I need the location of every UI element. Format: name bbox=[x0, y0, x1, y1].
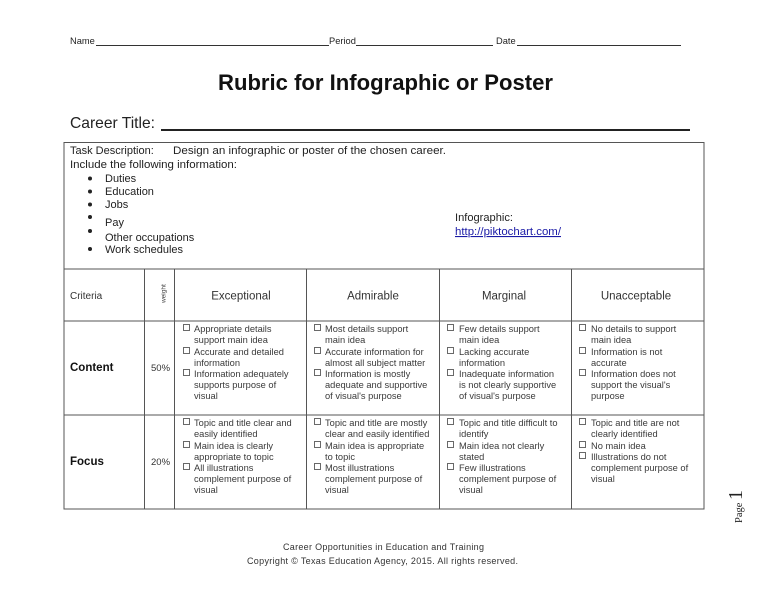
focus: admirable: to topic bbox=[325, 452, 355, 462]
content: exceptional: Appropriate details bbox=[194, 324, 272, 334]
focus: exceptional: All illustrations bbox=[194, 463, 254, 473]
infographic link: Infographic: bbox=[455, 212, 513, 224]
content: admirable: almost all subject matter bbox=[325, 358, 425, 368]
content: admirable: Information is mostly bbox=[325, 369, 411, 379]
footer: Copyright © Texas Education Agency, 2015. All rights reserved. bbox=[247, 556, 518, 566]
information list: Education bbox=[105, 186, 154, 198]
content: admirable: main idea bbox=[325, 335, 366, 345]
focus: marginal: Few illustrations bbox=[459, 463, 526, 473]
focus: marginal: stated bbox=[459, 452, 484, 462]
content: marginal: of visual's purpose bbox=[459, 391, 536, 401]
information list: Work schedules bbox=[105, 244, 184, 256]
title: Rubric for Infographic or Poster bbox=[218, 70, 553, 95]
table header row: Exceptional bbox=[211, 290, 271, 302]
focus: unacceptable: visual bbox=[591, 474, 615, 484]
criteria row: content: 50% bbox=[151, 363, 171, 374]
infographic link: http://piktochart.com/ bbox=[455, 226, 562, 238]
content: unacceptable: accurate bbox=[591, 358, 627, 368]
content: admirable: of visual's purpose bbox=[325, 391, 402, 401]
focus: exceptional: Main idea is clearly bbox=[194, 441, 273, 451]
career title field: Career Title: bbox=[70, 115, 155, 132]
content: exceptional: information bbox=[194, 358, 240, 368]
table header row: Unacceptable bbox=[601, 290, 671, 302]
focus: marginal bbox=[448, 418, 558, 495]
footer bbox=[247, 542, 518, 566]
footer: Career Opportunities in Education and Training bbox=[283, 542, 484, 552]
focus: admirable: clear and easily identified bbox=[325, 429, 429, 439]
rubric table grid bbox=[64, 142, 704, 509]
focus: marginal: identify bbox=[459, 429, 489, 439]
infographic link bbox=[455, 212, 562, 238]
focus: admirable: Topic and title are mostly bbox=[325, 418, 428, 428]
content: exceptional: supports purpose of bbox=[194, 380, 277, 390]
focus: exceptional: complement purpose of bbox=[194, 474, 292, 484]
task description panel bbox=[70, 145, 446, 256]
content: admirable: adequate and supportive bbox=[325, 380, 427, 390]
content: exceptional: visual bbox=[194, 391, 218, 401]
task description panel: Task Description: bbox=[70, 145, 154, 157]
content: unacceptable: Information is not bbox=[591, 347, 663, 357]
focus: admirable: Main idea is appropriate bbox=[325, 441, 424, 451]
content: admirable: Most details support bbox=[325, 324, 409, 334]
content: unacceptable bbox=[580, 324, 677, 401]
information list: Other occupations bbox=[105, 232, 195, 244]
table header row: Marginal bbox=[482, 290, 526, 302]
content: marginal: main idea bbox=[459, 335, 500, 345]
focus: unacceptable bbox=[580, 418, 689, 484]
information list: Duties bbox=[105, 173, 137, 185]
content: marginal: Lacking accurate bbox=[459, 347, 529, 357]
focus: marginal: Main idea not clearly bbox=[459, 441, 545, 451]
focus: unacceptable: clearly identified bbox=[591, 429, 658, 439]
table header row: Admirable bbox=[347, 290, 399, 302]
focus: unacceptable: Topic and title are not bbox=[591, 418, 680, 428]
focus: exceptional bbox=[184, 418, 292, 495]
content: admirable: Accurate information for bbox=[325, 347, 424, 357]
focus: marginal: visual bbox=[459, 485, 483, 495]
page number: 1 bbox=[725, 490, 747, 500]
content: unacceptable: support the visual's bbox=[591, 380, 671, 390]
focus: exceptional: visual bbox=[194, 485, 218, 495]
page number: Page bbox=[734, 502, 745, 523]
criteria row: focus: Focus bbox=[70, 456, 104, 468]
form fields: name, period, date: Name bbox=[70, 36, 95, 46]
form fields: name, period, date: Date bbox=[496, 36, 516, 46]
content: unacceptable: main idea bbox=[591, 335, 632, 345]
content: marginal: information bbox=[459, 358, 505, 368]
focus: exceptional: appropriate to topic bbox=[194, 452, 274, 462]
table header row bbox=[70, 284, 671, 304]
focus: unacceptable: Illustrations do not bbox=[591, 452, 667, 462]
information list: Pay bbox=[105, 217, 124, 229]
focus: unacceptable: No main idea bbox=[591, 441, 647, 451]
criteria row: focus: 20% bbox=[151, 457, 171, 468]
task description panel: Include the following information: bbox=[70, 159, 237, 171]
focus: marginal: complement purpose of bbox=[459, 474, 557, 484]
content: exceptional: Accurate and detailed bbox=[194, 347, 284, 357]
focus: admirable: complement purpose of bbox=[325, 474, 423, 484]
table header row: Criteria bbox=[70, 291, 103, 302]
content: marginal bbox=[448, 324, 556, 401]
focus: exceptional: easily identified bbox=[194, 429, 258, 439]
information list bbox=[88, 173, 195, 256]
focus: admirable bbox=[314, 418, 429, 495]
content: marginal: Few details support bbox=[459, 324, 540, 334]
information list: Jobs bbox=[105, 199, 129, 211]
criteria row: content: Content bbox=[70, 362, 114, 374]
focus: exceptional: Topic and title clear and bbox=[194, 418, 292, 428]
content: unacceptable: Information does not bbox=[591, 369, 676, 379]
focus: unacceptable: complement purpose of bbox=[591, 463, 689, 473]
focus: admirable: Most illustrations bbox=[325, 463, 395, 473]
focus: admirable: visual bbox=[325, 485, 349, 495]
criteria row: focus bbox=[70, 456, 171, 468]
task description panel: Design an infographic or poster of the chosen career. bbox=[173, 145, 446, 157]
criteria row: content bbox=[70, 362, 171, 374]
table header row: weight bbox=[160, 284, 168, 304]
content: exceptional: Information adequately bbox=[194, 369, 289, 379]
content: unacceptable: No details to support bbox=[591, 324, 677, 334]
form fields: name, period, date bbox=[70, 36, 681, 46]
content: marginal: Inadequate information bbox=[459, 369, 554, 379]
content: admirable bbox=[314, 324, 427, 401]
content: exceptional bbox=[184, 324, 289, 401]
content: marginal: is not clearly supportive bbox=[459, 380, 556, 390]
content: unacceptable: purpose bbox=[591, 391, 625, 401]
focus: marginal: Topic and title difficult to bbox=[459, 418, 558, 428]
page number bbox=[725, 490, 747, 523]
content: exceptional: support main idea bbox=[194, 335, 269, 345]
form fields: name, period, date: Period bbox=[329, 36, 356, 46]
